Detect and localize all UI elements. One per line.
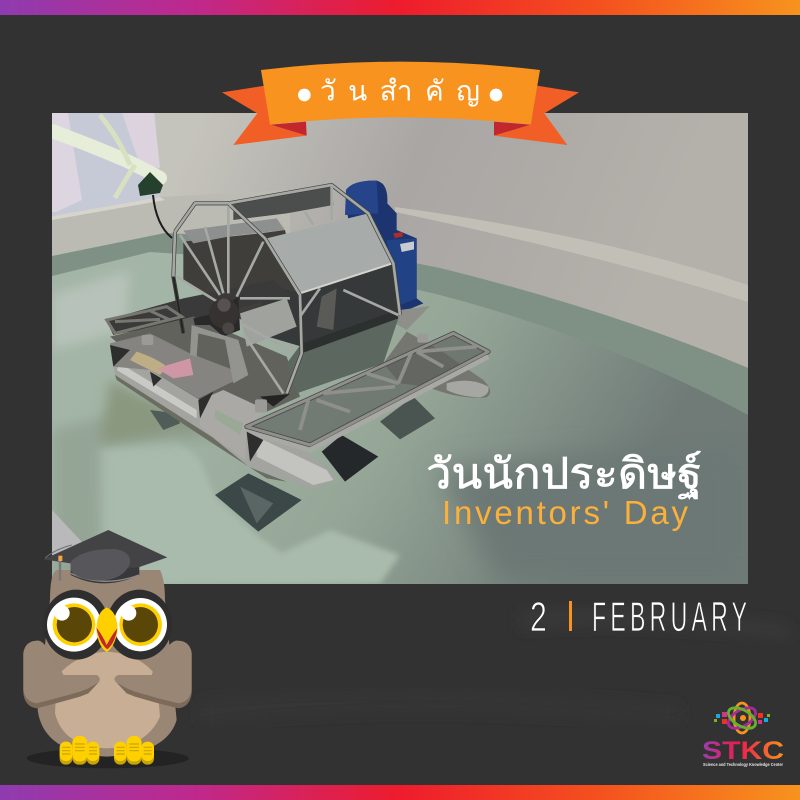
power cord <box>153 195 172 238</box>
ribbon banner <box>222 62 579 145</box>
owl right wing <box>115 641 192 708</box>
blue motor <box>345 181 423 318</box>
lower bin <box>287 310 398 393</box>
photo title: วันนักประดิษฐ์ <box>426 450 702 499</box>
front truss shadow <box>247 333 488 445</box>
owl beak <box>96 607 118 652</box>
wheel interior dark <box>183 230 302 343</box>
float midsection <box>208 390 263 423</box>
wheel frame shadow <box>173 185 400 393</box>
ribbon title: วันสำคัญ <box>320 75 480 106</box>
center dark interior <box>257 263 400 347</box>
side brackets <box>110 345 263 462</box>
water reflections <box>52 270 748 584</box>
underwater paddles <box>150 397 435 532</box>
bottom gradient bar <box>0 785 800 800</box>
owl right eye <box>107 590 172 660</box>
STKC logo <box>702 703 784 767</box>
left truss <box>107 307 182 333</box>
front truss <box>247 333 488 450</box>
logo caption: Science and Technology Knowledge Center <box>703 762 783 767</box>
photo title: Inventors' Day <box>442 494 688 531</box>
ribbon right tail <box>494 86 579 145</box>
window with flowers <box>52 113 163 216</box>
main left float <box>114 366 337 489</box>
back frame <box>109 294 214 335</box>
left ledge <box>52 196 290 256</box>
owl left wing <box>23 641 100 708</box>
water <box>52 233 748 584</box>
owl belly <box>55 652 160 748</box>
photo: paddle wheel aerator in a pool <box>52 113 748 584</box>
drum panel <box>267 213 393 293</box>
ribbon body <box>261 62 540 125</box>
date: 2 <box>530 593 547 640</box>
pool wall <box>52 113 748 368</box>
photo title <box>426 450 702 531</box>
gear stand <box>317 288 337 330</box>
aerator machine <box>106 181 490 532</box>
owl left eye <box>43 590 109 660</box>
dark well beside the float <box>260 394 290 407</box>
owl shadow <box>27 748 189 768</box>
right wall light stripe <box>395 207 748 302</box>
right float <box>383 306 490 398</box>
wheel axle hub <box>193 297 240 337</box>
top gradient bar <box>0 0 800 15</box>
logo atom icon <box>714 703 770 733</box>
ribbon left tail <box>222 86 307 145</box>
date: FEBRUARY <box>592 594 747 641</box>
owl mascot <box>23 530 192 768</box>
ribbon dots <box>298 89 502 101</box>
logo wordmark: STKC <box>702 737 784 765</box>
mesh plate <box>240 298 297 347</box>
owl feet <box>60 736 154 765</box>
ribbon folds <box>271 122 531 136</box>
deck <box>110 333 247 398</box>
front truss infill <box>247 333 488 445</box>
machine base fill <box>110 317 300 412</box>
water edge dark band <box>52 233 748 415</box>
perforated paddle <box>183 218 285 243</box>
graduation cap <box>43 530 167 583</box>
bearing stand <box>190 325 248 383</box>
bolts <box>142 333 428 413</box>
back panel of the wheel <box>233 185 333 220</box>
wheel frame and spokes <box>173 185 400 393</box>
owl body <box>38 570 177 757</box>
